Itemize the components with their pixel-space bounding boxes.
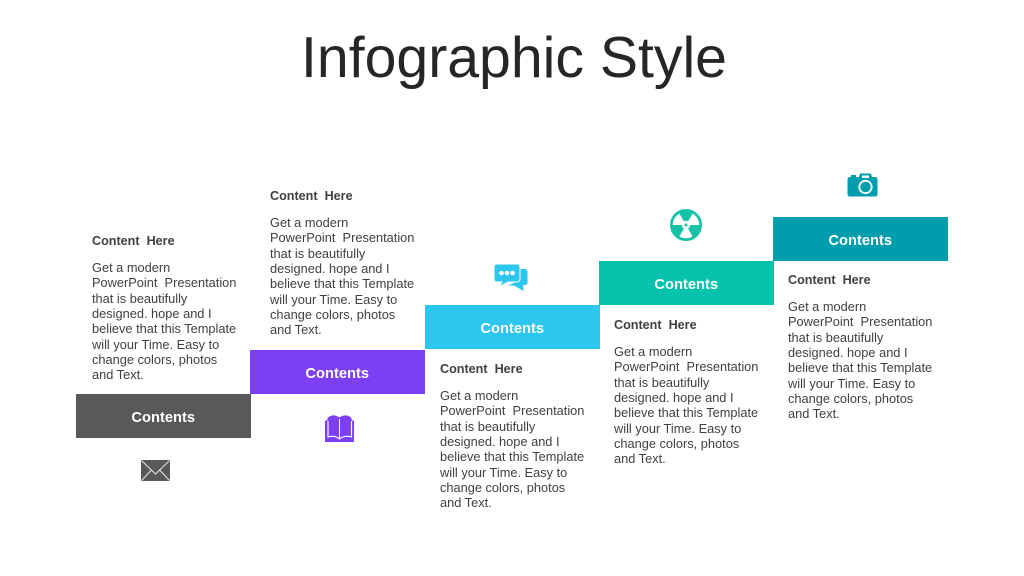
panel: step 2 bar: Contents bbox=[305, 366, 369, 382]
text block: step 5: Content Here bbox=[788, 273, 871, 287]
icon: chat bubbles bbox=[494, 264, 528, 291]
panel: step 2 bar bbox=[250, 350, 424, 394]
panel: step 4 bar bbox=[599, 261, 774, 305]
text block: step 2: Get a modern PowerPoint Presentation that is beautifully designed. hope and I believe that this Template will your Time. Easy to change colors, photos and Text. bbox=[270, 215, 414, 337]
panel: step 1 bar bbox=[76, 394, 250, 438]
text block: step 4: Content Here bbox=[614, 318, 697, 332]
text block: step 1: Content Here bbox=[92, 234, 175, 248]
text block: step 3: Content Here bbox=[440, 362, 523, 376]
text block: step 5: Get a modern PowerPoint Presentation that is beautifully designed. hope and I believe that this Template will your Time. Easy to change colors, photos and Text. bbox=[788, 299, 932, 421]
panel: step 3 bar bbox=[425, 305, 600, 349]
text block: step 3: Get a modern PowerPoint Presentation that is beautifully designed. hope and I believe that this Template will your Time. Easy to change colors, photos and Text. bbox=[440, 388, 584, 510]
title: Infographic Style bbox=[301, 26, 727, 90]
panel: step 4 bar: Contents bbox=[654, 277, 718, 293]
icon: open book bbox=[325, 415, 354, 442]
panel: step 5 bar: Contents bbox=[828, 233, 892, 249]
panel: step 1 bar: Contents bbox=[131, 410, 195, 426]
panel: step 5 bar bbox=[773, 217, 948, 261]
icon: radiation symbol bbox=[670, 209, 702, 241]
panel: step 3 bar: Contents bbox=[480, 321, 544, 337]
text block: step 1: Get a modern PowerPoint Presentation that is beautifully designed. hope and I believe that this Template will your Time. Easy to change colors, photos and Text. bbox=[92, 260, 236, 382]
text block: step 2: Content Here bbox=[270, 189, 353, 203]
text block: step 4: Get a modern PowerPoint Presentation that is beautifully designed. hope and I believe that this Template will your Time. Easy to change colors, photos and Text. bbox=[614, 344, 758, 466]
icon: envelope bbox=[141, 460, 170, 481]
icon: camera bbox=[848, 174, 878, 196]
